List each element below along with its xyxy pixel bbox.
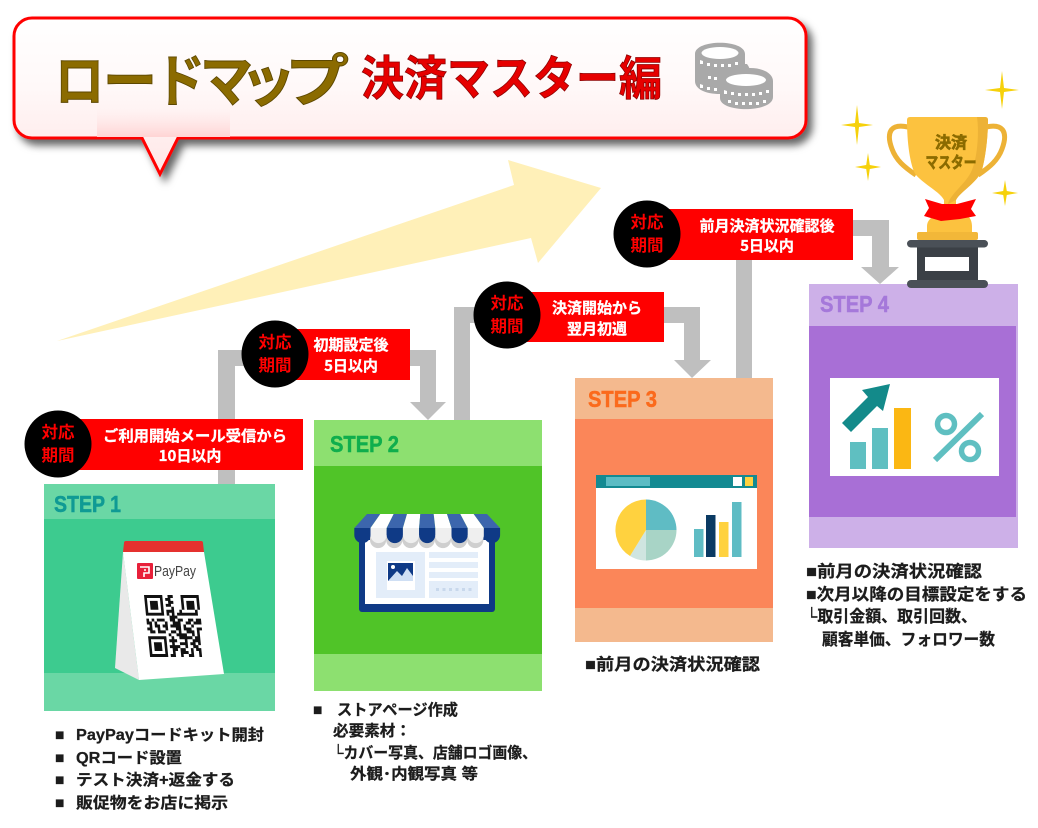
title: roadmap: ッ bbox=[240, 36, 296, 118]
text block: step 4 tasks: ■次月以降の目標設定をする bbox=[806, 585, 1027, 604]
badge: step 4 period bbox=[614, 200, 853, 268]
text block: step 4 tasks: 顧客単価、フォロワー数 bbox=[822, 629, 995, 649]
icon: PayPay QR stand: PayPay bbox=[154, 564, 197, 580]
text block: step 1 tasks: ■ bbox=[55, 727, 64, 744]
text block: step 1 tasks: ■ bbox=[55, 795, 64, 812]
step 1 label: STEP 1 bbox=[54, 491, 121, 517]
step 3 label: STEP 3 bbox=[588, 386, 657, 412]
text block: step 2 tasks: ストアページ作成 bbox=[337, 700, 458, 719]
text block: step 1 tasks: ■ bbox=[55, 772, 64, 789]
text block: step 3 tasks: ■前月の決済状況確認 bbox=[585, 655, 761, 674]
badge: step 3 period bbox=[474, 282, 664, 348]
badge: step 1 period: 対応 bbox=[42, 419, 75, 443]
step 2 label: STEP 2 bbox=[330, 431, 399, 457]
text block: step 2 tasks: 必要素材： bbox=[333, 721, 411, 740]
panel: step 1 bbox=[44, 484, 275, 711]
badge: step 3 period: 翌月初週 bbox=[567, 318, 627, 339]
trophy caption: マスター bbox=[926, 149, 976, 173]
text block: step 2 tasks: 外観･内観写真 等 bbox=[350, 764, 478, 783]
badge: step 3 period: 期間 bbox=[490, 313, 524, 337]
icon: coins bbox=[695, 43, 773, 109]
trophy ribbon bbox=[924, 199, 976, 221]
trophy caption: 決済 bbox=[935, 129, 967, 153]
step 4 label: STEP 4 bbox=[820, 291, 889, 317]
badge: step 2 period: 対応 bbox=[258, 329, 292, 353]
badge: step 3 period: 決済開始から bbox=[552, 297, 642, 318]
title: roadmap: ー bbox=[103, 36, 157, 118]
title: roadmap bbox=[55, 36, 349, 118]
icon: sparkles bbox=[841, 71, 1019, 206]
panel: step 3 bbox=[575, 378, 773, 642]
icon: PayPay QR stand bbox=[115, 541, 224, 680]
panel: step 2 bbox=[314, 420, 542, 691]
icon: store bbox=[354, 514, 500, 612]
chart: growth and percent bbox=[830, 378, 999, 476]
text block: step 1 tasks: ■ bbox=[55, 750, 64, 767]
badge: step 4 period: 5日以内 bbox=[740, 235, 794, 256]
badge: step 1 period: ご利用開始メール受信から bbox=[103, 425, 287, 446]
big rising arrow bbox=[57, 160, 601, 341]
badge: step 2 period bbox=[242, 320, 410, 388]
callout: title bubble bbox=[14, 18, 806, 174]
text block: step 1 tasks: QRコード設置 bbox=[76, 749, 182, 767]
connector: step 1 to step 2 bbox=[218, 350, 446, 484]
badge: step 2 period: 初期設定後 bbox=[313, 334, 389, 355]
title: roadmap: ロ bbox=[55, 36, 104, 118]
badge: step 3 period: 対応 bbox=[490, 290, 524, 314]
text block: step 1 tasks: PayPayコードキット開封 bbox=[76, 726, 264, 744]
badge: step 4 period: 対応 bbox=[630, 209, 664, 233]
text block: step 4 tasks: ■前月の決済状況確認 bbox=[806, 562, 983, 581]
badge: step 1 period: 期間 bbox=[42, 442, 74, 466]
connector: step 2 to step 3 bbox=[454, 307, 711, 420]
title: roadmap: プ bbox=[285, 36, 349, 118]
badge: step 4 period: 期間 bbox=[630, 232, 664, 256]
badge: step 1 period bbox=[24, 410, 303, 478]
subtitle: payment master: 決済マスター編 bbox=[361, 40, 662, 109]
text block: step 4 tasks: └取引金額、取引回数、 bbox=[806, 606, 977, 626]
text block: step 2 tasks: ■ bbox=[313, 702, 322, 719]
text block: step 1 tasks bbox=[55, 726, 264, 812]
badge: step 1 period: 10日以内 bbox=[159, 445, 221, 466]
chart: dashboard window bbox=[596, 475, 757, 569]
text block: step 1 tasks: テスト決済+返金する bbox=[76, 770, 235, 789]
badge: step 4 period: 前月決済状況確認後 bbox=[699, 215, 835, 236]
trophy caption bbox=[926, 129, 976, 173]
text block: step 1 tasks: 販促物をお店に掲示 bbox=[76, 794, 228, 812]
title: roadmap: マ bbox=[200, 36, 253, 118]
icon: trophy bbox=[889, 117, 1005, 288]
title: roadmap: ド bbox=[155, 36, 205, 118]
text block: step 2 tasks: └カバー写真、店舗ロゴ画像、 bbox=[333, 743, 537, 762]
text block: step 4 tasks bbox=[806, 562, 1027, 649]
panel: step 4 bbox=[809, 284, 1018, 548]
text block: step 2 tasks bbox=[313, 700, 537, 783]
badge: step 2 period: 期間 bbox=[258, 352, 292, 376]
connector: step 3 to step 4 bbox=[736, 220, 899, 378]
badge: step 2 period: 5日以内 bbox=[324, 355, 378, 376]
